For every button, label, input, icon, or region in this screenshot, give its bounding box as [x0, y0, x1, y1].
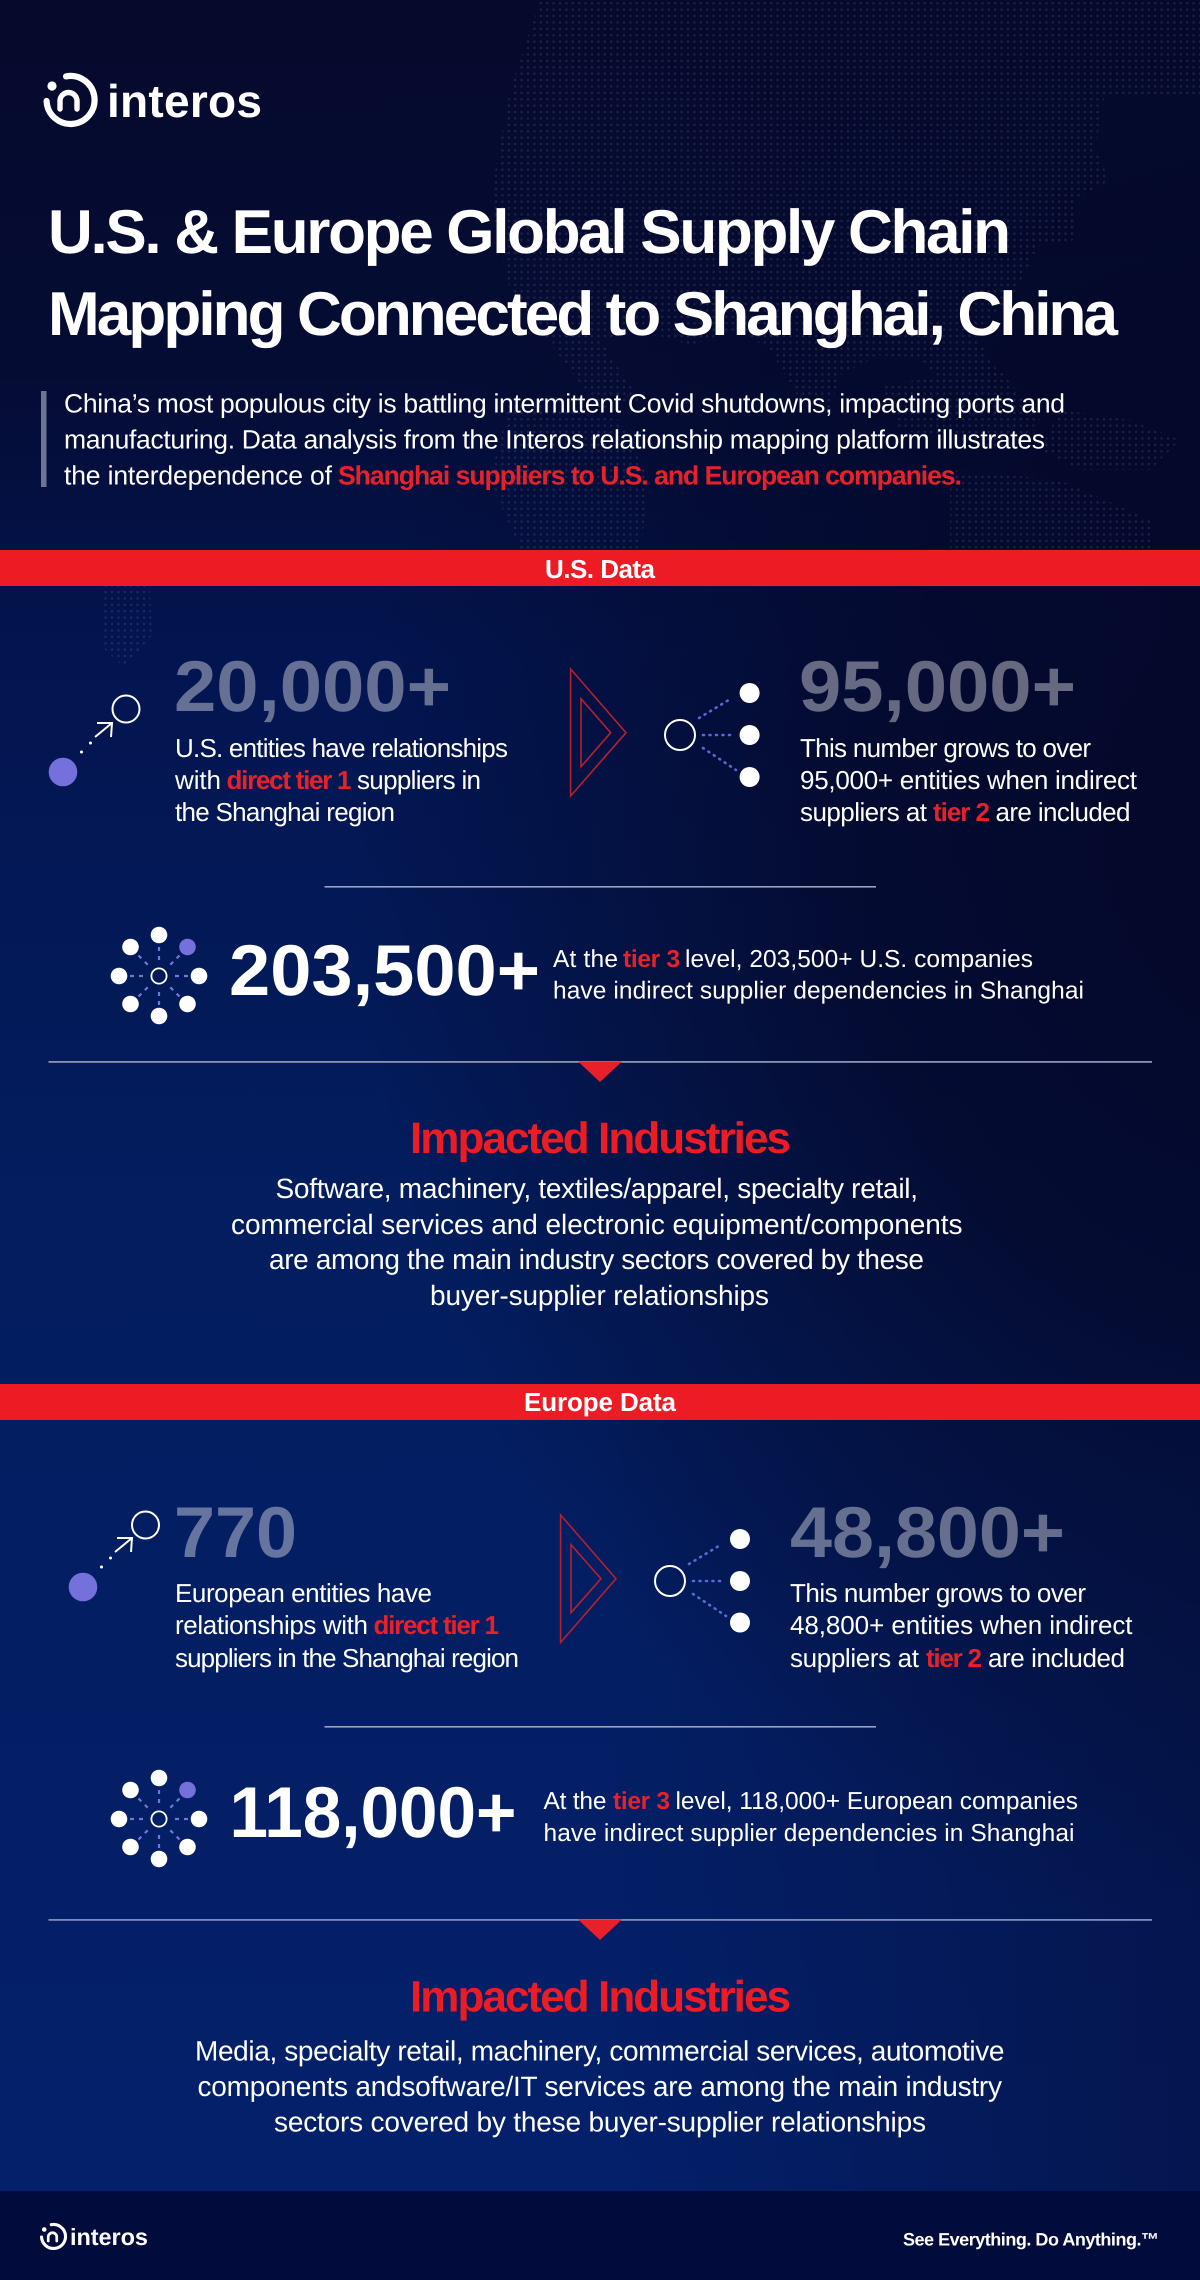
- wordmark: interos: [107, 75, 262, 127]
- heading: Impacted Industries: [410, 1114, 791, 1163]
- dotted world map backdrop: [100, 0, 1200, 668]
- banner: U.S. Data: [0, 550, 1200, 586]
- stat description: At the: [544, 1788, 606, 1815]
- stat description: level, 118,000+ European companies: [676, 1788, 1078, 1815]
- icon: interos mark: [47, 76, 95, 124]
- stat: 95,000+: 95,000+: [799, 647, 1076, 727]
- icon: one to many hub: [665, 683, 760, 787]
- stat description: This number grows to over: [800, 733, 1091, 763]
- arrow: tier progression chevron: [561, 1515, 616, 1642]
- icon: direct link arrow: [49, 696, 140, 786]
- stat description: direct tier 1: [374, 1610, 499, 1640]
- icon: pointer triangle: [578, 1062, 622, 1082]
- stat: 20,000+: 20,000+: [174, 647, 451, 727]
- stat description: [174, 733, 508, 827]
- section rule: [48, 1061, 1152, 1063]
- icon: one to many hub: [655, 1529, 750, 1632]
- tagline: See Everything. Do Anything.™: [903, 2230, 1159, 2250]
- intro paragraph: manufacturing. Data analysis from the Interos relationship mapping platform illustrates: [64, 424, 1045, 454]
- stat description: have indirect supplier dependencies in Shanghai: [553, 978, 1084, 1004]
- stat description: [553, 946, 1084, 1004]
- stat description: This number grows to over: [790, 1578, 1086, 1608]
- panel: U.S. tier 1: [49, 647, 508, 827]
- stat: 770: 770: [174, 1493, 297, 1573]
- heading: Impacted Industries: [410, 1972, 791, 2022]
- description: [231, 1173, 962, 1311]
- stat: 118,000+: 118,000+: [230, 1773, 516, 1853]
- title: [48, 198, 1119, 349]
- section rule: [48, 1919, 1152, 1921]
- stat description: are included: [996, 797, 1130, 827]
- logo: interos: [47, 75, 262, 127]
- stat description: [790, 1578, 1133, 1673]
- stat description: direct tier 1: [226, 765, 352, 795]
- icon: tier 3 cluster: [111, 927, 207, 1024]
- stat description: suppliers in: [357, 765, 481, 795]
- stat description: [800, 733, 1138, 827]
- stat description: U.S. entities have relationships: [175, 733, 508, 763]
- intro paragraph: Shanghai suppliers to U.S. and European companies.: [338, 460, 962, 490]
- divider: [324, 886, 876, 888]
- stat description: [544, 1788, 1078, 1847]
- panel: Europe tier 3: [111, 1770, 1078, 1867]
- stat description: relationships with: [175, 1610, 368, 1640]
- stat description: At the: [553, 946, 618, 973]
- description: commercial services and electronic equipment/components: [231, 1209, 962, 1240]
- intro accent bar: [41, 391, 46, 487]
- stat description: suppliers in the Shanghai region: [175, 1643, 519, 1673]
- footer: [0, 2191, 1200, 2280]
- description: buyer-supplier relationships: [430, 1280, 769, 1311]
- stat description: suppliers at: [800, 797, 928, 827]
- stat description: tier 2: [926, 1643, 982, 1673]
- stat: 48,800+: 48,800+: [790, 1493, 1065, 1573]
- stat description: level, 203,500+ U.S. companies: [685, 946, 1033, 973]
- intro paragraph: the interdependence of: [64, 460, 333, 490]
- description: Software, machinery, textiles/apparel, specialty retail,: [276, 1173, 918, 1204]
- banner: Europe Data: [0, 1384, 1200, 1420]
- intro text block: [41, 388, 1065, 490]
- stat description: with: [174, 765, 221, 795]
- description: Media, specialty retail, machinery, commercial services, automotive: [195, 2036, 1004, 2066]
- title: U.S. & Europe Global Supply Chain: [48, 198, 1011, 267]
- stat description: the Shanghai region: [175, 797, 395, 827]
- panel: Europe tier 2: [655, 1493, 1133, 1673]
- stat description: 95,000+ entities when indirect: [800, 765, 1138, 795]
- title: Mapping Connected to Shanghai, China: [48, 280, 1119, 349]
- icon: direct link arrow: [69, 1512, 159, 1601]
- arrow: tier progression chevron: [571, 669, 626, 796]
- banner: U.S. Data: U.S. Data: [545, 554, 656, 584]
- footer band: [0, 2191, 1200, 2280]
- stat description: suppliers at: [790, 1643, 920, 1673]
- description: are among the main industry sectors covered by these: [269, 1244, 924, 1275]
- description: sectors covered by these buyer-supplier relationships: [274, 2106, 926, 2138]
- panel: Europe impacted industries: [48, 1919, 1152, 2138]
- description: [195, 2036, 1004, 2138]
- stat description: are included: [988, 1643, 1125, 1673]
- stat description: [175, 1578, 519, 1673]
- panel: U.S. impacted industries: [48, 1061, 1152, 1311]
- footer logo: [42, 2224, 148, 2250]
- icon: tier 3 cluster: [111, 1770, 207, 1867]
- divider: [324, 1726, 876, 1728]
- intro paragraph: [64, 388, 1065, 490]
- panel: U.S. tier 2: [665, 647, 1138, 827]
- icon: pointer triangle: [578, 1920, 622, 1940]
- stat description: tier 3: [613, 1788, 670, 1815]
- stat description: European entities have: [175, 1578, 432, 1608]
- description: components andsoftware/IT services are among the main industry: [198, 2071, 1002, 2102]
- stat: 203,500+: 203,500+: [229, 931, 540, 1011]
- stat description: tier 3: [623, 946, 680, 973]
- stat description: 48,800+ entities when indirect: [790, 1610, 1133, 1640]
- icon: interos mark: [42, 2224, 66, 2248]
- panel: U.S. tier 3: [111, 927, 1084, 1024]
- wordmark: interos: [70, 2224, 148, 2250]
- banner: Europe Data: Europe Data: [524, 1387, 677, 1417]
- stat description: tier 2: [933, 797, 990, 827]
- stat description: have indirect supplier dependencies in Shanghai: [544, 1820, 1074, 1847]
- intro paragraph: China’s most populous city is battling intermittent Covid shutdowns, impacting ports and: [64, 388, 1065, 418]
- panel: Europe tier 1: [69, 1493, 519, 1673]
